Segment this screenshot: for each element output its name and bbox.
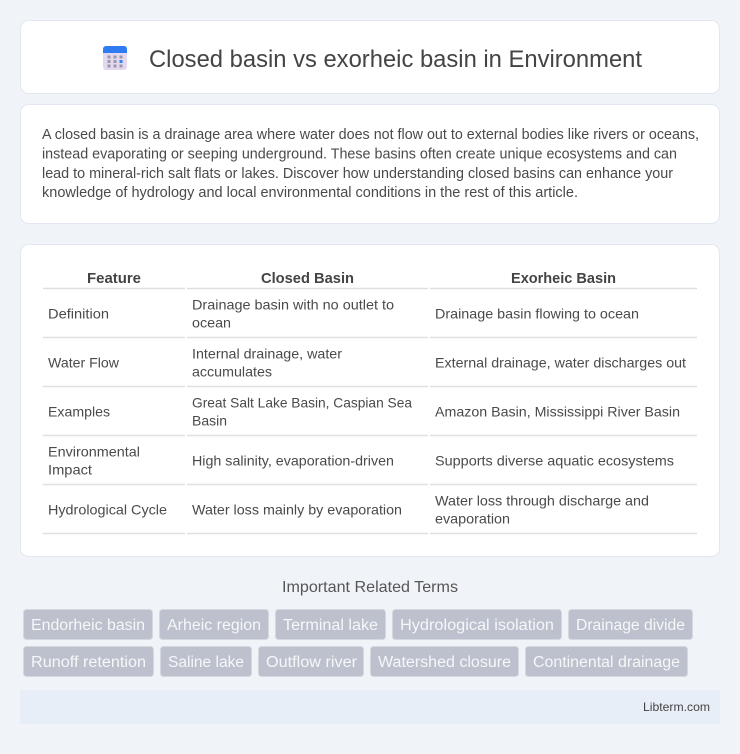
row: water flow: [48, 346, 686, 380]
tag: Saline lake: [160, 646, 252, 676]
tag: Saline lake: Saline lake: [168, 654, 244, 671]
row: hydrological cycle: Water loss through discharge and: [435, 492, 649, 508]
table header: Closed Basin: [261, 270, 354, 287]
row: environmental impact: [48, 444, 674, 478]
footer brand: Libterm.com: [643, 700, 710, 714]
tag: Runoff retention: [24, 646, 154, 676]
related terms tags: [24, 610, 692, 676]
table header: [87, 270, 616, 287]
row: environmental impact: High salinity, evaporation-driven: [192, 452, 394, 468]
tag: Watershed closure: [370, 646, 518, 676]
row: definition: Definition: [48, 306, 109, 322]
related terms heading: Important Related Terms: [282, 579, 458, 596]
intro text: A closed basin is a drainage area where water does not flow out to external bodies like rivers or oceans,: [42, 127, 699, 143]
tag: Hydrological isolation: [392, 610, 562, 640]
row: environmental impact: Supports diverse aquatic ecosystems: [435, 452, 674, 468]
intro text: lead to mineral-rich salt flats or lakes. Discover how understanding closed basins can enhance your: [42, 166, 673, 182]
tag: Drainage divide: [568, 610, 692, 640]
row: examples: Amazon Basin, Mississippi River Basin: [435, 404, 680, 420]
row: definition: Drainage basin flowing to ocean: [435, 306, 639, 322]
tag: Watershed closure: Watershed closure: [378, 654, 511, 671]
row: hydrological cycle: Hydrological Cycle: [48, 502, 167, 518]
footer bar: [20, 690, 720, 724]
row: examples: [48, 394, 680, 428]
tag: Hydrological isolation: Hydrological isolation: [400, 617, 554, 634]
row: examples: Great Salt Lake Basin, Caspian Sea: [192, 394, 412, 410]
header panel: [20, 20, 720, 94]
row: definition: [48, 296, 639, 330]
tag: Arheic region: [160, 610, 268, 640]
row: hydrological cycle: evaporation: [435, 510, 510, 526]
tag: Arheic region: Arheic region: [167, 617, 261, 634]
intro text: knowledge of hydrology and local environmental conditions in the rest of this article.: [42, 185, 578, 201]
intro panel: [20, 104, 720, 224]
table header: Exorheic Basin: [511, 270, 616, 287]
comparison table panel: [20, 244, 720, 556]
row: hydrological cycle: Water loss mainly by evaporation: [192, 502, 402, 518]
icon: calendar: [103, 46, 127, 70]
tag: Continental drainage: Continental drainage: [533, 654, 680, 671]
tag: Drainage divide: Drainage divide: [576, 617, 685, 634]
tag: Runoff retention: Runoff retention: [31, 654, 146, 671]
row: definition: ocean: [192, 314, 231, 330]
row: examples: Examples: [48, 404, 110, 420]
intro text: instead evaporating or seeping underground. These basins often create unique ecosystems and can: [42, 146, 677, 162]
row: hydrological cycle: [48, 492, 649, 526]
tag: Endorheic basin: Endorheic basin: [31, 617, 145, 634]
row: water flow: Water Flow: [48, 354, 120, 370]
tag: Outflow river: Outflow river: [266, 654, 357, 671]
tag: Terminal lake: [276, 610, 386, 640]
row: water flow: Internal drainage, water: [192, 346, 342, 362]
row: environmental impact: Environmental: [48, 444, 140, 460]
row: water flow: accumulates: [192, 364, 272, 380]
row: definition: Drainage basin with no outlet to: [192, 296, 394, 312]
row: environmental impact: Impact: [48, 462, 92, 478]
tag: Endorheic basin: [24, 610, 152, 640]
row: examples: Basin: [192, 412, 227, 428]
title: Closed basin vs exorheic basin in Environment: [149, 46, 642, 73]
tag: Continental drainage: [526, 646, 688, 676]
row: water flow: External drainage, water discharges out: [435, 354, 686, 370]
table header: Feature: [87, 270, 141, 287]
tag: Outflow river: [258, 646, 364, 676]
intro text: [42, 127, 699, 201]
tag: Terminal lake: Terminal lake: [283, 617, 378, 634]
